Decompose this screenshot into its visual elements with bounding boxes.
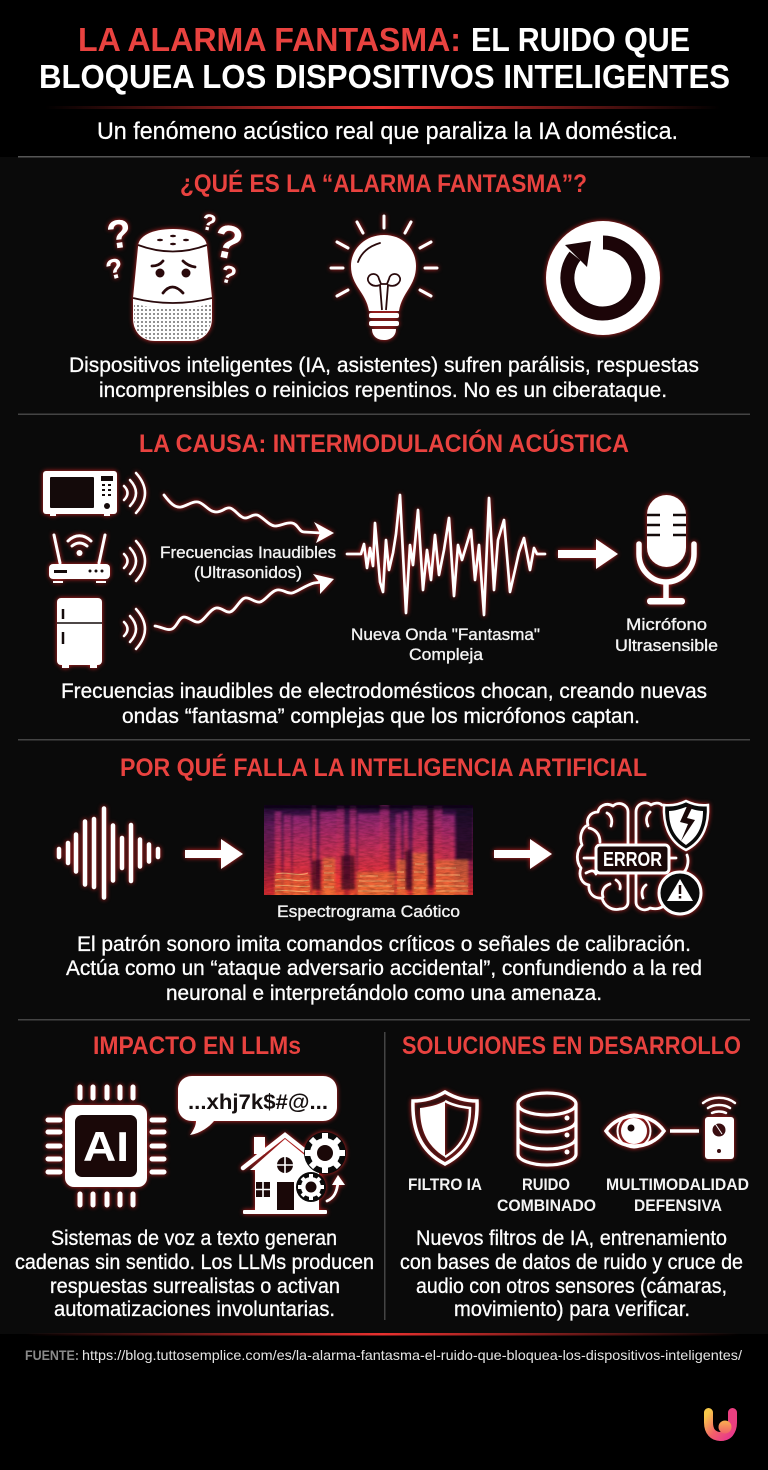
subtitle: Un fenómeno acústico real que paraliza la IA doméstica. bbox=[97, 118, 678, 145]
label: microfono: Micrófono bbox=[626, 615, 707, 634]
footer source: FUENTE: bbox=[25, 1347, 79, 1363]
text: falla bbox=[66, 933, 702, 1005]
panel: soluciones bbox=[400, 1032, 749, 1321]
icon: sound bars bbox=[59, 808, 158, 898]
icon: router bbox=[49, 535, 110, 583]
icon: brain error bbox=[577, 801, 708, 914]
text: falla: El patrón sonoro imita comandos críticos o señales de calibración. bbox=[77, 933, 691, 956]
icon: confused speaker: ? bbox=[209, 213, 248, 271]
heading: que es: ¿QUÉ ES LA “ALARMA FANTASMA”? bbox=[180, 169, 587, 198]
label: frecuencias: Frecuencias Inaudibles bbox=[160, 543, 336, 562]
arrow: to spectrogram bbox=[185, 839, 243, 869]
icon: confused speaker: ? bbox=[217, 260, 239, 291]
text: que es: Dispositivos inteligentes (IA, asistentes) sufren parálisis, respuestas bbox=[69, 354, 699, 377]
title: BLOQUEA LOS DISPOSITIVOS INTELIGENTES bbox=[39, 58, 730, 95]
icon: confused speaker: ? bbox=[199, 208, 219, 236]
labels: soluciones: DEFENSIVA bbox=[634, 1196, 722, 1215]
label: nueva onda: Compleja bbox=[409, 645, 484, 664]
label: microfono bbox=[615, 615, 718, 655]
label: espectrograma: Espectrograma Caótico bbox=[277, 902, 460, 921]
panel: impacto en LLMs bbox=[15, 1032, 374, 1321]
labels: soluciones bbox=[408, 1175, 749, 1215]
icon: microwave bbox=[43, 471, 117, 516]
labels: soluciones: COMBINADO bbox=[497, 1196, 596, 1215]
icon: shield bbox=[413, 1092, 477, 1164]
footer source: https://blog.tuttosemplice.com/es/la-alarma-fantasma-el-ruido-que-bloquea-los-dispositivos-inteligentes/ bbox=[82, 1347, 742, 1363]
icon: confused speaker: ? bbox=[104, 211, 134, 258]
arrow: bottom squiggle bbox=[155, 574, 334, 630]
text: causa: Frecuencias inaudibles de electrodomésticos chocan, creando nuevas bbox=[61, 680, 707, 703]
icon: AI chip: AI bbox=[83, 1123, 129, 1170]
arrow: top squiggle bbox=[164, 495, 334, 543]
title: LA ALARMA FANTASMA: bbox=[78, 21, 461, 58]
icon: fridge bbox=[57, 598, 102, 668]
heading: impacto: IMPACTO EN LLMs bbox=[93, 1032, 301, 1060]
text: impacto: Sistemas de voz a texto generan bbox=[51, 1227, 337, 1250]
text: impacto: automatizaciones involuntarias. bbox=[54, 1298, 335, 1321]
heading: causa: LA CAUSA: INTERMODULACIÓN ACÚSTICA bbox=[139, 428, 629, 458]
arrow: to brain bbox=[494, 839, 552, 869]
icon: restart bbox=[546, 221, 660, 335]
icon: confused speaker: ? bbox=[102, 252, 127, 286]
text: impacto: respuestas surrealistas o activan bbox=[50, 1275, 340, 1298]
text: causa bbox=[61, 680, 707, 728]
labels: soluciones: FILTRO IA bbox=[408, 1175, 482, 1194]
icon: light bulb bbox=[331, 216, 437, 340]
text: falla: Actúa como un “ataque adversario accidental”, confundiendo a la red bbox=[66, 957, 702, 980]
chart: spectrogram bbox=[262, 804, 475, 897]
icon: eye and phone bbox=[606, 1098, 735, 1159]
text: que es bbox=[69, 354, 699, 402]
icon: brain error: ERROR bbox=[603, 849, 662, 871]
icon: speech bubble bbox=[178, 1076, 337, 1135]
label: nueva onda: Nueva Onda "Fantasma" bbox=[351, 625, 540, 644]
text: soluciones: con bases de datos de ruido y cruce de bbox=[400, 1251, 743, 1274]
text: que es: incomprensibles o reinicios repentinos. No es un ciberataque. bbox=[99, 379, 667, 402]
labels: soluciones: RUIDO bbox=[522, 1175, 570, 1194]
icon: AI chip bbox=[48, 1087, 164, 1205]
text: soluciones bbox=[400, 1227, 743, 1321]
labels: soluciones: MULTIMODALIDAD bbox=[606, 1175, 749, 1194]
icon: database bbox=[518, 1093, 576, 1165]
icon: smart home bbox=[243, 1132, 346, 1214]
label: frecuencias bbox=[160, 543, 336, 582]
text: soluciones: Nuevos filtros de IA, entrenamiento bbox=[416, 1227, 727, 1250]
text: impacto bbox=[15, 1227, 374, 1321]
icon: speech bubble: ...xhj7k$#@... bbox=[188, 1091, 328, 1114]
title: EL RUIDO QUE bbox=[471, 21, 690, 58]
label: nueva onda bbox=[351, 625, 540, 664]
text: causa: ondas “fantasma” complejas que los micrófonos captan. bbox=[122, 705, 640, 728]
text: soluciones: movimiento) para verificar. bbox=[454, 1298, 690, 1321]
arrow: to microphone bbox=[558, 539, 618, 569]
text: soluciones: audio con otros sensores (cámaras, bbox=[416, 1275, 727, 1298]
heading: falla: POR QUÉ FALLA LA INTELIGENCIA ARTIFICIAL bbox=[120, 753, 647, 782]
panel: por que falla bbox=[59, 753, 708, 1005]
icon: confused speaker bbox=[102, 208, 248, 341]
icon: sound waves bbox=[124, 473, 145, 649]
title bbox=[39, 21, 730, 95]
panel: que es bbox=[69, 169, 699, 402]
label: microfono: Ultrasensible bbox=[615, 636, 718, 655]
panel: la causa bbox=[43, 428, 718, 728]
chart: ghost waveform bbox=[347, 495, 545, 615]
label: frecuencias: (Ultrasonidos) bbox=[194, 563, 302, 582]
text: falla: neuronal e interpretándolo como una amenaza. bbox=[166, 982, 602, 1005]
icon: microphone bbox=[639, 495, 694, 604]
text: impacto: cadenas sin sentido. Los LLMs producen bbox=[15, 1251, 374, 1274]
icon: logo bbox=[708, 1412, 732, 1436]
